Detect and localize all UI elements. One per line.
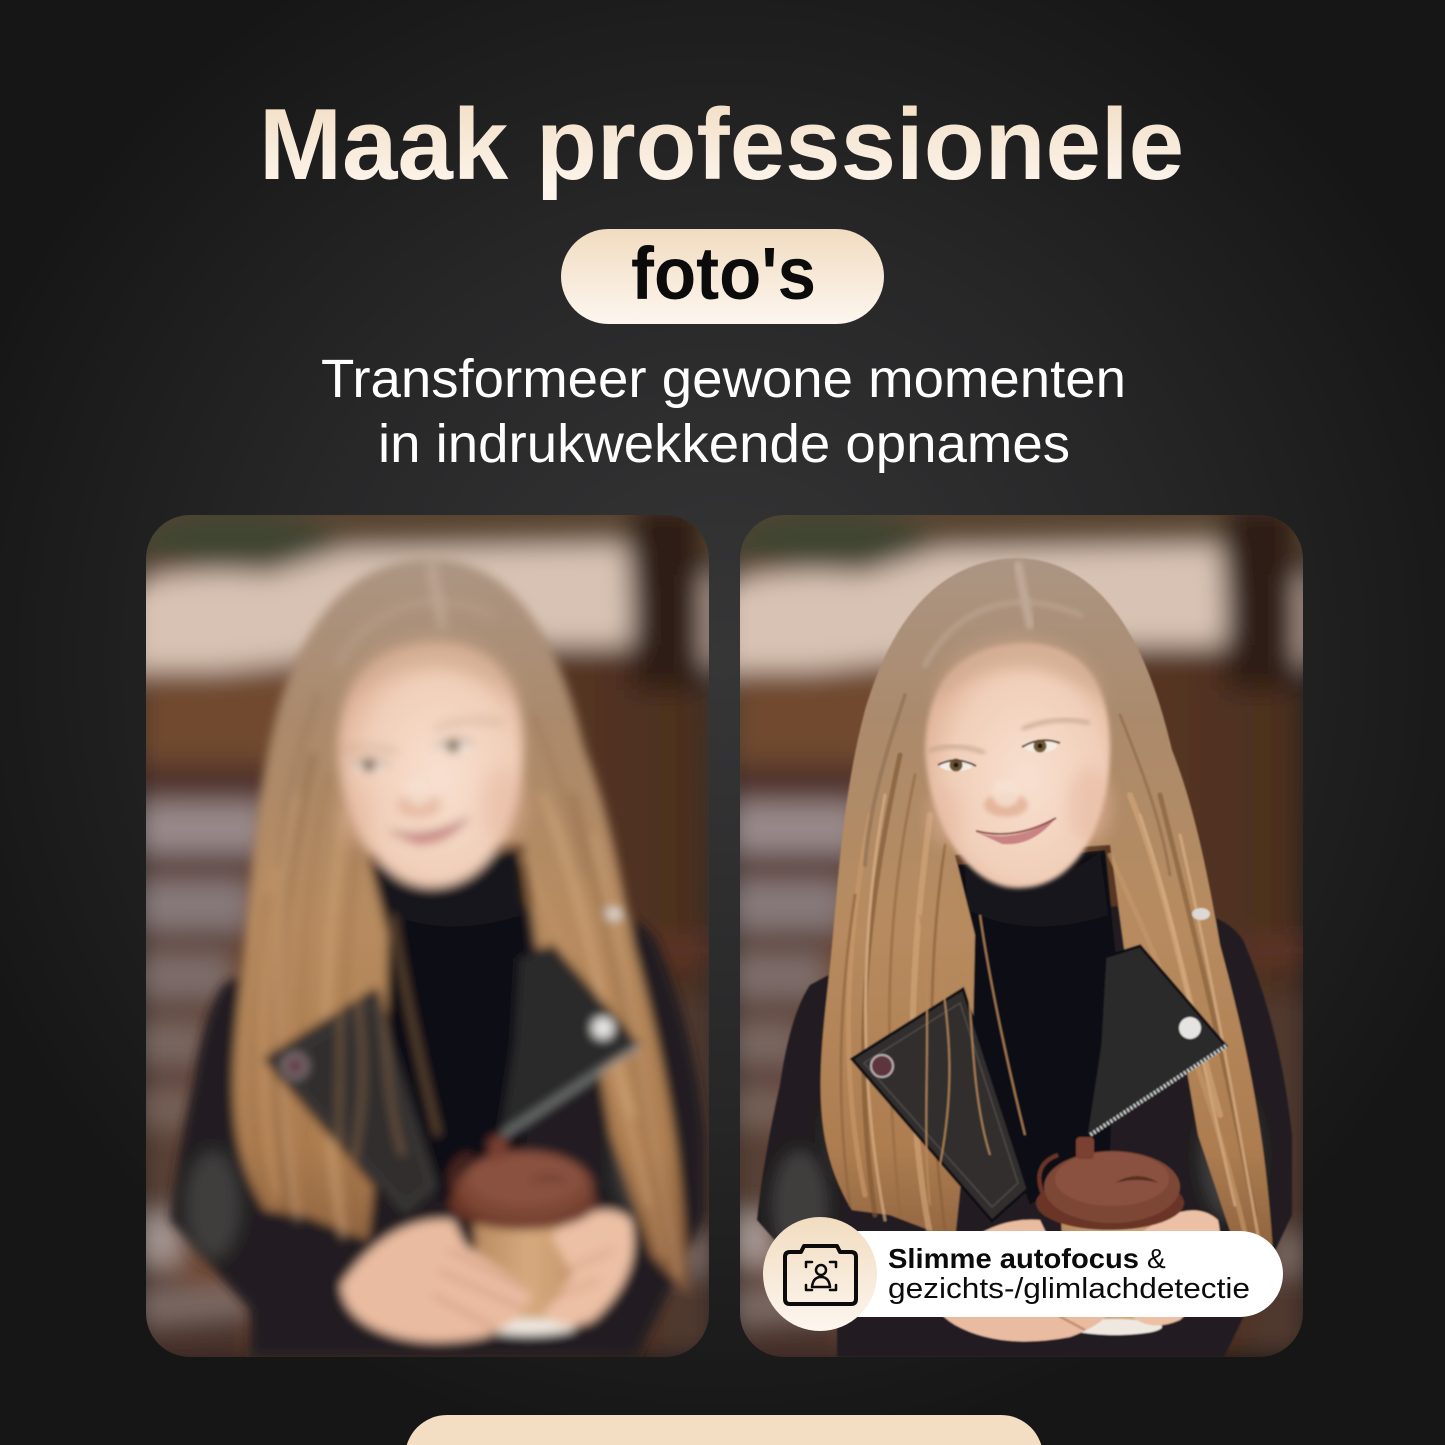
subtitle: in indrukwekkende opnames — [378, 414, 1070, 474]
badge pill — [800, 1231, 1283, 1317]
subtitle — [321, 349, 1126, 474]
feature badge: gezichts-/glimlachdetectie — [888, 1273, 1250, 1305]
feature badge — [763, 1217, 1283, 1331]
title: Maak professionele — [259, 89, 1184, 201]
subtitle: Transformeer gewone momenten — [321, 349, 1126, 409]
badge text: Slimme autofocus — [888, 1243, 1139, 1274]
photo: sharp after image — [720, 495, 1320, 1365]
bottom call-to-action pill — [405, 1415, 1043, 1445]
photo: blurred before image — [126, 495, 726, 1365]
badge icon circle — [763, 1217, 877, 1331]
highlighted pill: foto's: foto's — [631, 232, 816, 315]
feature badge: & — [1147, 1243, 1166, 1274]
icon: camera with face detection — [785, 1246, 856, 1304]
highlighted pill: foto's — [561, 229, 884, 324]
